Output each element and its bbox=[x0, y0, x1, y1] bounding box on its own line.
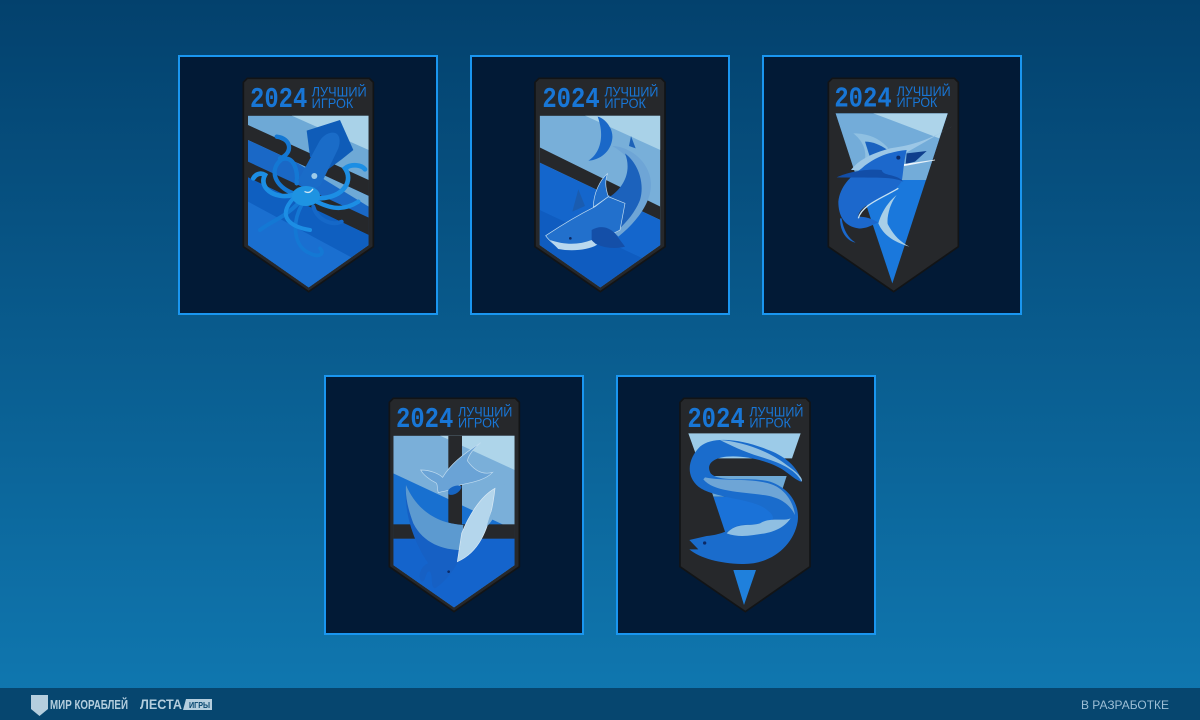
icon: eel bbox=[689, 440, 802, 564]
patch label: лучший игрок: ЛУЧШИЙ bbox=[312, 85, 367, 100]
patch label: лучший игрок: ИГРОК bbox=[749, 416, 791, 431]
patch year: 2024: 2024 bbox=[687, 403, 745, 436]
patch label: лучший игрок: ЛУЧШИЙ bbox=[749, 405, 803, 420]
striped field bbox=[393, 436, 515, 610]
patch label: лучший игрок bbox=[749, 405, 803, 431]
patch label: лучший игрок: ИГРОК bbox=[604, 96, 646, 111]
patch: manta rays bbox=[389, 398, 519, 612]
striped field bbox=[248, 116, 369, 290]
patch label: лучший игрок bbox=[897, 84, 951, 110]
patch label: лучший игрок: ЛУЧШИЙ bbox=[604, 85, 658, 100]
patch: squid bbox=[243, 78, 373, 292]
badge: игры: ИГРЫ bbox=[189, 701, 210, 710]
patch label: лучший игрок: ЛУЧШИЙ bbox=[458, 405, 512, 420]
patch: eel bbox=[680, 398, 810, 612]
striped field bbox=[540, 116, 660, 290]
patch label: лучший игрок: ИГРОК bbox=[312, 96, 353, 111]
patch: shark bbox=[535, 78, 665, 292]
patch label: лучший игрок: ЛУЧШИЙ bbox=[897, 84, 951, 99]
triangle field bbox=[688, 433, 801, 605]
icon: shield logo bbox=[31, 695, 48, 716]
icon: small manta bbox=[421, 443, 493, 495]
icon: shark bbox=[546, 117, 651, 250]
patch label: лучший игрок bbox=[312, 85, 367, 111]
patch year: 2024: 2024 bbox=[250, 83, 307, 116]
panel: manta frame bbox=[325, 376, 583, 634]
patch label: лучший игрок: ИГРОК bbox=[458, 416, 499, 431]
status: в разработке: В РАЗРАБОТКЕ bbox=[1081, 698, 1169, 712]
patch year: 2024: 2024 bbox=[834, 82, 892, 115]
panel: shark frame bbox=[471, 56, 729, 314]
icon: marlin bbox=[837, 127, 952, 247]
patch: marlin bbox=[828, 78, 958, 292]
brand: леста: ЛЕСТА bbox=[140, 696, 182, 712]
brand: мир кораблей: МИР КОРАБЛЕЙ bbox=[50, 697, 128, 712]
patch label: лучший игрок: ИГРОК bbox=[897, 95, 937, 110]
icon: squid bbox=[253, 120, 365, 255]
patch label: лучший игрок bbox=[458, 405, 512, 431]
badge: игры bbox=[183, 699, 212, 710]
triangle field bbox=[836, 113, 948, 283]
icon: large manta bbox=[406, 483, 505, 588]
panel: squid frame bbox=[179, 56, 437, 314]
patch year: 2024: 2024 bbox=[542, 83, 600, 116]
patch year: 2024: 2024 bbox=[396, 403, 453, 436]
panel: marlin frame bbox=[763, 56, 1021, 314]
footer bar bbox=[0, 688, 1200, 720]
patch label: лучший игрок bbox=[604, 85, 658, 111]
panel: eel frame bbox=[617, 376, 875, 634]
